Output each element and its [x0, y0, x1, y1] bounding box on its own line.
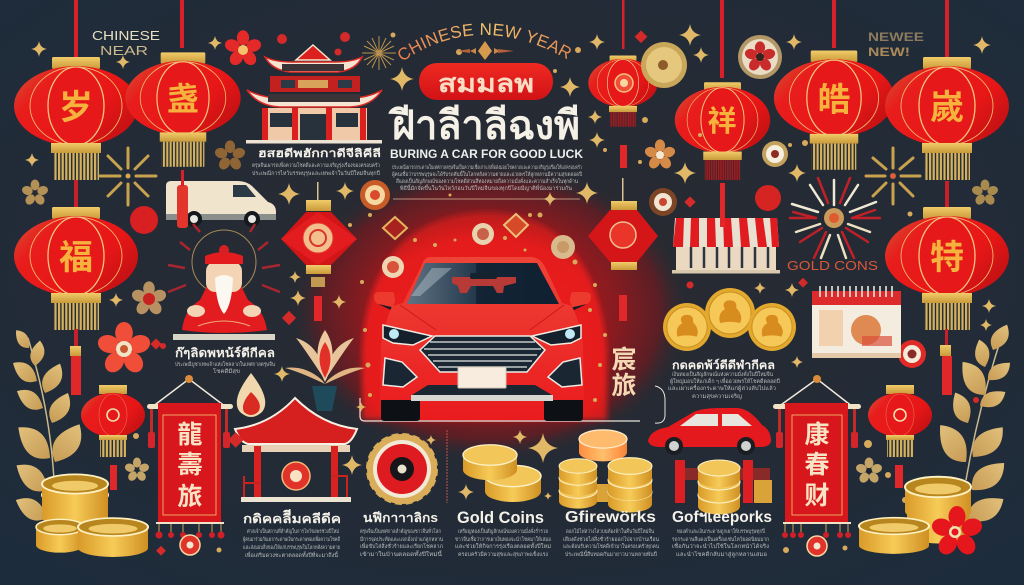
text block: coins caption	[668, 358, 780, 400]
text block: goldworks: ทองคำและเงินกระดาษถูกเผาให้บรรพบุรุษทุกปี	[677, 528, 765, 535]
text block: shrine caption: เพื่อเสริมดวงชะตาตลอดทั้งปีที่จะมาถึงนี้	[245, 551, 339, 559]
text block: gold coins: ครอบครัวมีความสุขและสุขภาพแข็งแรง	[458, 550, 548, 558]
text block: temple caption: ตรุษจีนเผารถเพื่อความโชคดีและความเจริญรุ่งเรืองของครอบครัว	[252, 161, 380, 169]
text block: fireworks	[563, 509, 659, 558]
banner: left: 龍	[177, 421, 203, 449]
small corner labels right	[868, 30, 924, 59]
text block: goldworks	[672, 509, 772, 558]
banner: left: 旅	[177, 483, 203, 511]
small corner labels: NEAR	[100, 43, 148, 58]
lantern: upper centre right	[675, 0, 770, 225]
text block: temple caption	[252, 147, 381, 177]
lantern: right middle: 特	[930, 239, 964, 277]
text block: deity caption	[175, 346, 275, 375]
text block: fireworks: และต้อนรับความโชคดีเข้ามาในครอบครัวทุกคน	[563, 542, 659, 550]
text block: deity caption: ประเพณีบูชาเทพเจ้าแห่งโชคลาภในเทศกาลตรุษจีน	[175, 360, 275, 368]
text block: fireworks: Gfirewörks	[565, 509, 656, 526]
subheading: burning a car for good luck: BURING A CAR FOR GOOD LUCK	[390, 147, 583, 161]
icon: deity figure	[168, 224, 280, 340]
text block: coins caption: กดคดพ้ว์ดีดีพำกีคล	[672, 358, 775, 372]
icon: gold coins pair	[463, 445, 541, 502]
icon: left leaf branch	[8, 327, 89, 526]
banner: right: 财	[804, 482, 830, 510]
text: gold cons: GOLD CONS	[787, 258, 878, 273]
banner: right: 康	[804, 421, 830, 449]
text block: medallion caption: เข้ามาในบ้านตลอดทั้งปีใหม่นี้	[360, 550, 443, 558]
text block: title description: สีแดงเป็นสัญลักษณ์ของความโชคดีส่วนสีทองหมายถึงความมั่งคั่งและความสำเร็จในทุกด้าน	[395, 177, 578, 185]
icon: firework burst gold	[100, 148, 156, 205]
title: curved chinese new year: CHINESE NEW YEAR	[398, 23, 571, 60]
small corner labels right: NEWEE	[868, 30, 924, 44]
icon: flame drop	[237, 373, 265, 417]
icon: title divider ornament	[457, 41, 514, 60]
text block: shrine caption: ศาลเจ้าเป็นสถานที่สำคัญในการไหว้ขอพรช่วงปีใหม่	[247, 527, 339, 535]
icon: awning shop	[672, 185, 780, 274]
panel: red car	[374, 257, 591, 421]
text block: medallion caption: ตรุษจีนเป็นเทศกาลสำคัญของชาวจีนทั่วโลก	[360, 527, 441, 535]
lantern: top left 1	[14, 0, 138, 210]
text block: gold coins: และช่วยให้กิจการรุ่งเรืองตลอดทั้งปีใหม่	[455, 542, 551, 550]
text block: title description: พิธีนี้มักจัดขึ้นในวันไหว้ก่อนวันปีใหม่จีนของทุกปีโดยมีญาติพี่น้องมาร่วมกัน	[400, 184, 572, 192]
icon: red sedan	[648, 408, 771, 455]
lantern: top right 1: 皓	[818, 81, 850, 118]
icon: firework burst centre top	[362, 36, 396, 70]
text block: medallion caption: นฟีกาาาลิกs	[363, 511, 438, 525]
text block: fireworks: เสียงดังช่วยไล่สิ่งชั่วร้ายออกไปจากบ้านเรือน	[563, 535, 659, 543]
text block: gold coins: Gold Coins	[457, 508, 544, 527]
text: chinese characters beside car	[611, 346, 637, 400]
text block: shrine caption: กดิคคลีีมคลีดีค	[243, 509, 341, 526]
text block: deity caption: ก๊ๆลิดพหน้ร์ดีกีคล	[175, 346, 275, 360]
icon: red flowers and brown blossoms	[21, 30, 999, 485]
text block: fireworks: ประเพณีนี้สืบทอดกันมายาวนานหลายพันปี	[565, 550, 657, 558]
text block: coins caption: ผู้ใหญ่มอบให้แก่เด็ก ๆ เพื่ออวยพรให้โชคดีตลอดปี	[670, 377, 780, 385]
text block: fireworks: ดอกไม้ไฟสว่างไสวบนท้องฟ้าในคืนวันปีใหม่จีน	[566, 528, 654, 535]
text block: goldworks: เชื่อกันว่าจะนำไปใช้ในโลกหน้าได้จริง	[672, 542, 769, 550]
icon: firework burst red	[790, 178, 880, 258]
text block: temple caption: ฮสฮดีพฮักกาดีจีลิคีลี	[258, 147, 381, 160]
icon: gold bowls right with flower	[859, 477, 984, 558]
lantern: left middle: 福	[59, 239, 93, 277]
text block: medallion caption: เพื่อขับไล่สิ่งชั่วร้ายและเรียกโชคลาภ	[360, 542, 443, 550]
banner: right: 春	[804, 451, 830, 479]
icon: gold bowls left	[36, 474, 148, 557]
icon: lotus in pot	[285, 330, 365, 411]
icon: decor above car	[382, 214, 575, 278]
icon: temple	[246, 45, 382, 144]
icon: delivery van	[166, 170, 276, 228]
icon: three gold coins	[663, 288, 796, 351]
text block: title description: ประเพณีเผารถกระดาษในเทศกาลตรุษจีนเป็นความเชื่อเก่าแก่เพื่อส่งมอบโชคลาภและความเจริญรุ่งเรืองให้แก่ครอบครัว	[392, 163, 582, 171]
icon: medallions	[360, 35, 926, 368]
text block: coins caption: เงินทองเป็นสัญลักษณ์แห่งความมั่งคั่งในปีใหม่จีน	[672, 370, 773, 378]
lantern: diamond left	[281, 182, 357, 321]
small corner labels	[92, 28, 160, 58]
icon: flame drop inner	[243, 392, 260, 415]
lantern: top right 2: 嵗	[930, 89, 964, 127]
lantern: top right 1	[774, 0, 894, 170]
small corner labels right: NEW!	[868, 45, 910, 59]
icon: gold medallion	[367, 434, 437, 504]
icon: coin stacks	[559, 430, 652, 512]
text block: title description	[392, 163, 582, 199]
heading pill	[419, 63, 553, 100]
text block: goldworks: Gofฯเeeporks	[672, 509, 772, 526]
text block: title description: ผู้คนเชื่อว่าบรรพบุรุษจะได้รับรถคันนี้ในโลกหลังความตายและอวยพรให้ลูกหลานมีความสุขตลอดปี	[392, 170, 582, 178]
icon: shrine	[235, 398, 357, 502]
lantern: top left 1: 岁	[59, 89, 93, 127]
banner: left: 壽	[177, 451, 203, 479]
lantern: diamond right	[588, 178, 658, 321]
lantern: left middle	[14, 207, 138, 395]
text block: deity caption: โชคดีมีสุข	[213, 367, 240, 375]
text block: medallion caption	[360, 511, 443, 558]
text block: gold coins: ชาวจีนเชื่อว่าการเผาเงินทองจะนำโชคมาให้เสมอ	[455, 535, 551, 543]
text block: goldworks: และนำโชคดีกลับมาสู่ลูกหลานเสมอ	[676, 550, 767, 558]
text block: shrine caption	[243, 509, 341, 559]
icon: coin stack with red gate	[675, 460, 772, 515]
icon: firework burst right	[866, 148, 920, 204]
text block: goldworks: รถกระดาษสีแดงเป็นเครื่องเซ่นไหว้ยอดนิยมมาก	[672, 535, 769, 543]
small corner labels: CHINESE	[92, 28, 160, 43]
banner: left	[147, 375, 233, 555]
text block: medallion caption: มีการจุดประทัดและแจกอั่งเปาแก่ลูกหลาน	[360, 535, 443, 543]
text: chinese characters beside car: 宸	[611, 346, 637, 374]
text block: temple caption: ประเพณีการไหว้บรรพบุรุษและเทพเจ้าในวันปีใหม่จีนทุกปี	[252, 170, 380, 177]
banner: right	[773, 375, 861, 556]
heading: thai title: ฝีาลีาลีฉงพี	[388, 104, 580, 148]
text block: shrine caption: และส่งมอบสิ่งของให้แก่บรรพบุรุษในโลกหลังความตาย	[243, 543, 340, 551]
lantern: top left 2	[125, 0, 241, 167]
text block: shrine caption: ผู้คนมาร่วมกันเผากระดาษเงินกระดาษทองเพื่อความโชคดี	[243, 535, 340, 543]
text block: coins caption: และเผาเครื่องกระดาษให้แก่ผู้ล่วงลับไปแล้ว	[668, 384, 776, 392]
text block: gold coins: เหรียญทองเป็นสัญลักษณ์ของความมั่งคั่งร่ำรวย	[458, 527, 548, 535]
lantern: small lower left	[81, 385, 145, 490]
text: chinese characters beside car: 旅	[611, 372, 637, 400]
lantern: top left 2: 盏	[167, 81, 199, 117]
heading pill: สมมลพ	[438, 70, 534, 98]
lantern: small lower right	[868, 385, 932, 488]
lantern: top right 2	[885, 0, 1009, 208]
text block: coins caption: ความสุขความเจริญ	[692, 393, 742, 400]
lantern: small top centre right	[588, 0, 658, 168]
icon: calendar	[812, 286, 901, 358]
panel: central red glow behind car	[290, 162, 690, 462]
divider line	[446, 430, 448, 503]
text block: gold coins	[455, 508, 551, 558]
icon: right leaf branch	[931, 321, 1015, 529]
lantern: upper centre right: 祥	[707, 105, 737, 138]
lantern: right middle	[885, 207, 1009, 395]
